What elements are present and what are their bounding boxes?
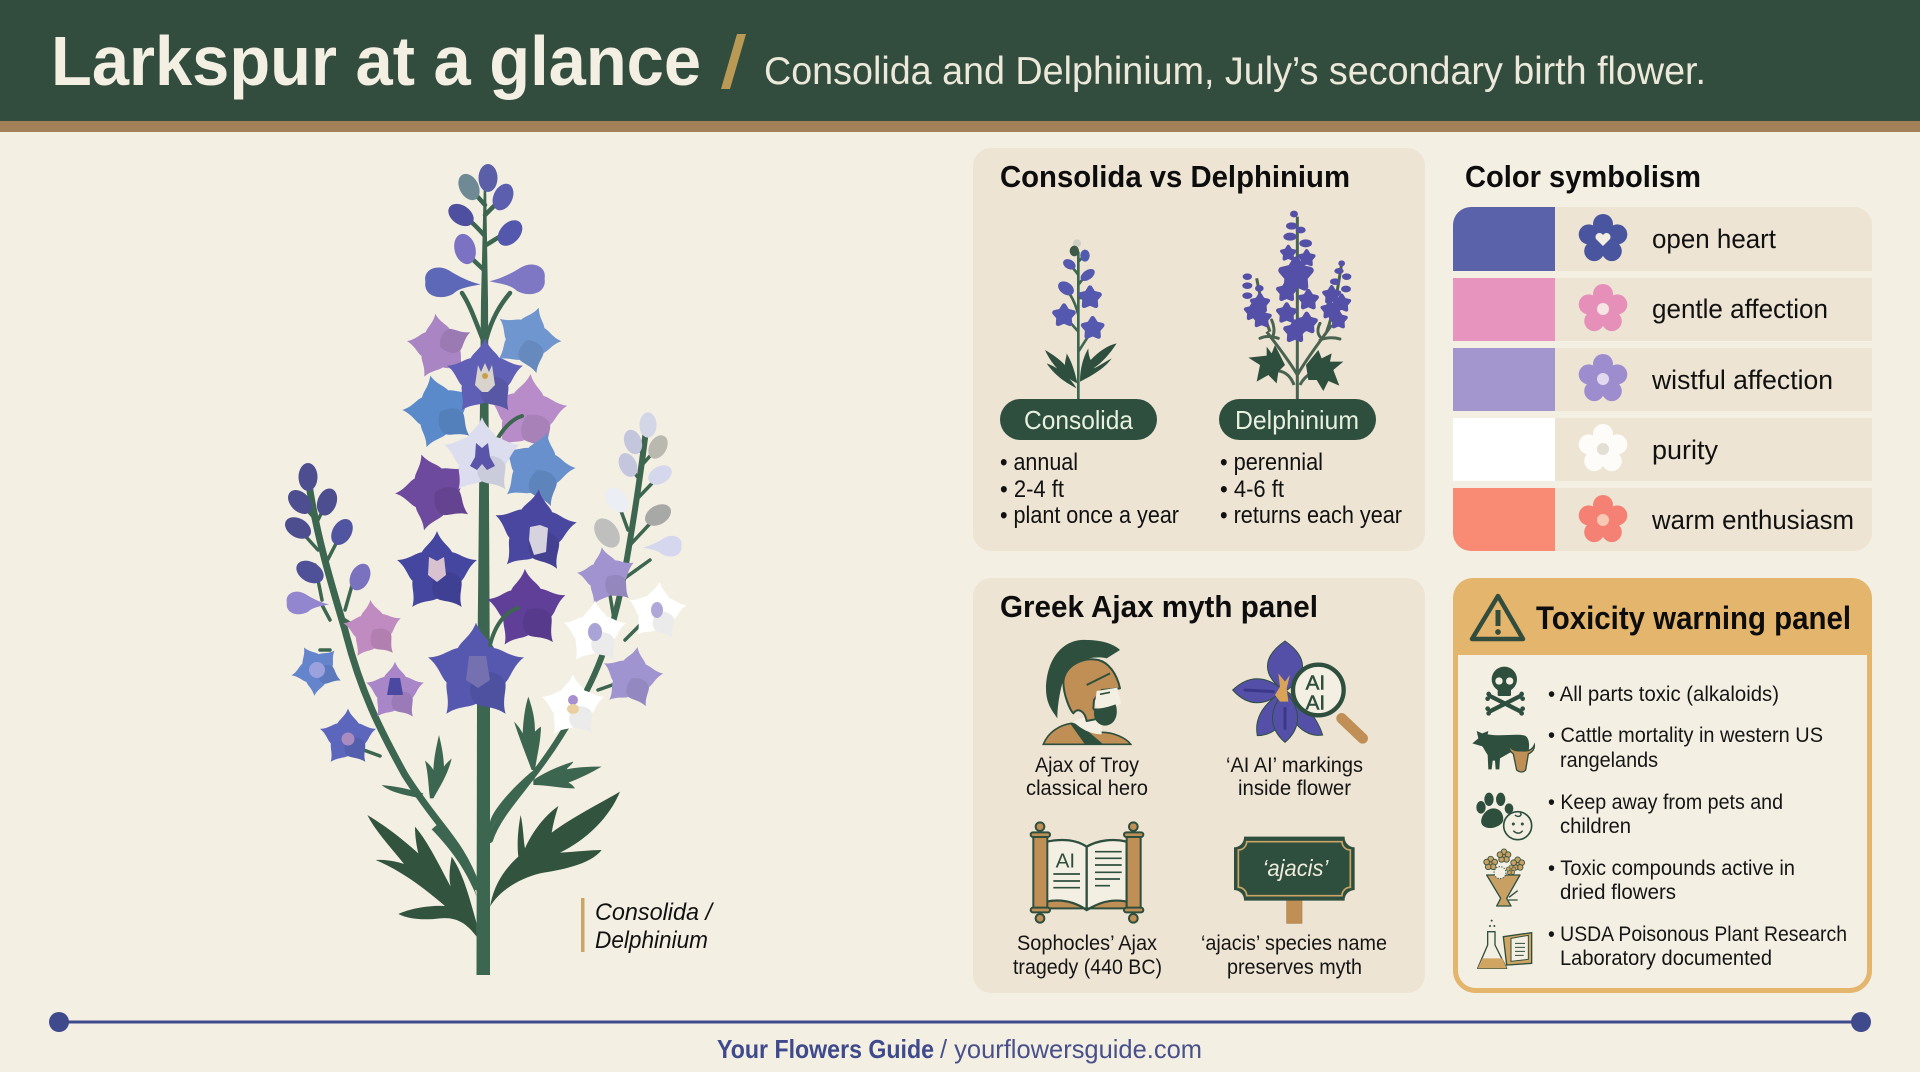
leaves (367, 697, 620, 937)
icon: Ajax helmeted hero (1043, 640, 1131, 744)
icon: warning triangle (1472, 596, 1523, 639)
myth captions: Ajax of Troy (1035, 753, 1139, 777)
icon: dried bouquet (1484, 849, 1525, 906)
title: Larkspur at a glance (51, 22, 701, 100)
row: purity (1453, 418, 1872, 481)
row: purity: purity (1652, 435, 1718, 465)
icon: flower under magnifier with AI AI: AI (1306, 671, 1325, 694)
Delphinium traits: • perennial (1220, 449, 1323, 476)
myth captions: classical hero (1026, 776, 1148, 800)
icon: scroll book (1031, 822, 1143, 923)
heading: Color symbolism (1465, 159, 1701, 194)
warning list: • All parts toxic (alkaloids) (1548, 682, 1779, 706)
label pill: Delphinium: Delphinium (1235, 405, 1359, 435)
title slash (721, 34, 746, 89)
left branch buds and flowers (280, 463, 427, 768)
row: gentle affection (1453, 278, 1872, 341)
myth captions (1013, 753, 1387, 979)
row: warm enthusiasm (1453, 488, 1872, 551)
Consolida traits: • plant once a year (1000, 502, 1179, 529)
icon: Consolida plant (1045, 239, 1117, 400)
warning list: children (1560, 814, 1631, 838)
footer text: / yourflowersguide.com (940, 1034, 1202, 1064)
footer text: Your Flowers Guide (717, 1034, 934, 1064)
warning list: dried flowers (1560, 880, 1676, 904)
footer rule (49, 1012, 1871, 1032)
label pill: Consolida (1000, 399, 1157, 440)
heading: Consolida vs Delphinium (1000, 159, 1350, 194)
myth captions: tragedy (440 BC) (1013, 955, 1162, 979)
icon: flower under magnifier with AI AI (1233, 641, 1363, 742)
plant caption (581, 898, 714, 954)
warning list: • Cattle mortality in western US (1548, 723, 1823, 747)
row: gentle affection: gentle affection (1652, 294, 1828, 324)
row: open heart (1453, 207, 1872, 271)
panel: Greek Ajax myth (973, 578, 1425, 993)
header band (0, 0, 1920, 132)
icon: flower under magnifier with AI AI: AI (1306, 691, 1325, 714)
stems (298, 178, 660, 975)
warning list: rangelands (1560, 748, 1658, 772)
plant caption: Delphinium (595, 927, 708, 954)
Consolida traits: • 2-4 ft (1000, 476, 1064, 503)
label pill: Consolida: Consolida (1024, 405, 1133, 435)
icon: cattle (1472, 731, 1534, 772)
warning list: • USDA Poisonous Plant Research (1548, 922, 1847, 946)
label pill: Delphinium (1219, 399, 1376, 440)
myth captions: ‘ajacis’ species name (1201, 931, 1387, 955)
myth captions: inside flower (1238, 776, 1351, 800)
panel: Consolida vs Delphinium (973, 148, 1425, 551)
icon: ajacis plaque: ‘ajacis’ (1263, 855, 1329, 881)
right branch buds and flowers (538, 412, 692, 741)
footer text (717, 1034, 1202, 1064)
heading: Greek Ajax myth panel (1000, 589, 1318, 624)
row: warm enthusiasm: warm enthusiasm (1651, 505, 1854, 535)
row: open heart: open heart (1652, 224, 1776, 254)
panel: Color symbolism (1453, 159, 1872, 551)
icon: skull and crossbones (1485, 667, 1525, 716)
main spike flowers (381, 295, 587, 725)
icon: flask and book (1478, 920, 1532, 968)
Delphinium traits (1220, 449, 1402, 529)
heading: Toxicity warning panel (1536, 600, 1851, 636)
icon: scroll book: AI (1056, 850, 1075, 873)
warning list: Laboratory documented (1560, 946, 1772, 970)
warning list (1548, 682, 1847, 970)
icon: Delphinium plant (1242, 211, 1351, 400)
icon: ajacis plaque (1234, 837, 1355, 923)
row: wistful affection: wistful affection (1651, 365, 1833, 395)
warning list: • Toxic compounds active in (1548, 856, 1795, 880)
plant caption: Consolida / (595, 899, 714, 926)
row: wistful affection (1453, 348, 1872, 411)
Delphinium traits: • 4-6 ft (1220, 476, 1284, 503)
panel: Toxicity warning (1453, 578, 1872, 990)
myth captions: ‘AI AI’ markings (1226, 753, 1363, 777)
main spike buds (425, 164, 545, 297)
Delphinium traits: • returns each year (1220, 502, 1402, 529)
myth captions: Sophocles’ Ajax (1017, 931, 1157, 955)
icon: paw and child (1476, 793, 1532, 840)
Consolida traits (1000, 449, 1179, 529)
subtitle: Consolida and Delphinium, July’s secondary birth flower. (764, 50, 1706, 93)
main illustration: larkspur plant (280, 164, 692, 975)
warning list: • Keep away from pets and (1548, 790, 1783, 814)
myth captions: preserves myth (1227, 955, 1362, 979)
Consolida traits: • annual (1000, 449, 1078, 476)
